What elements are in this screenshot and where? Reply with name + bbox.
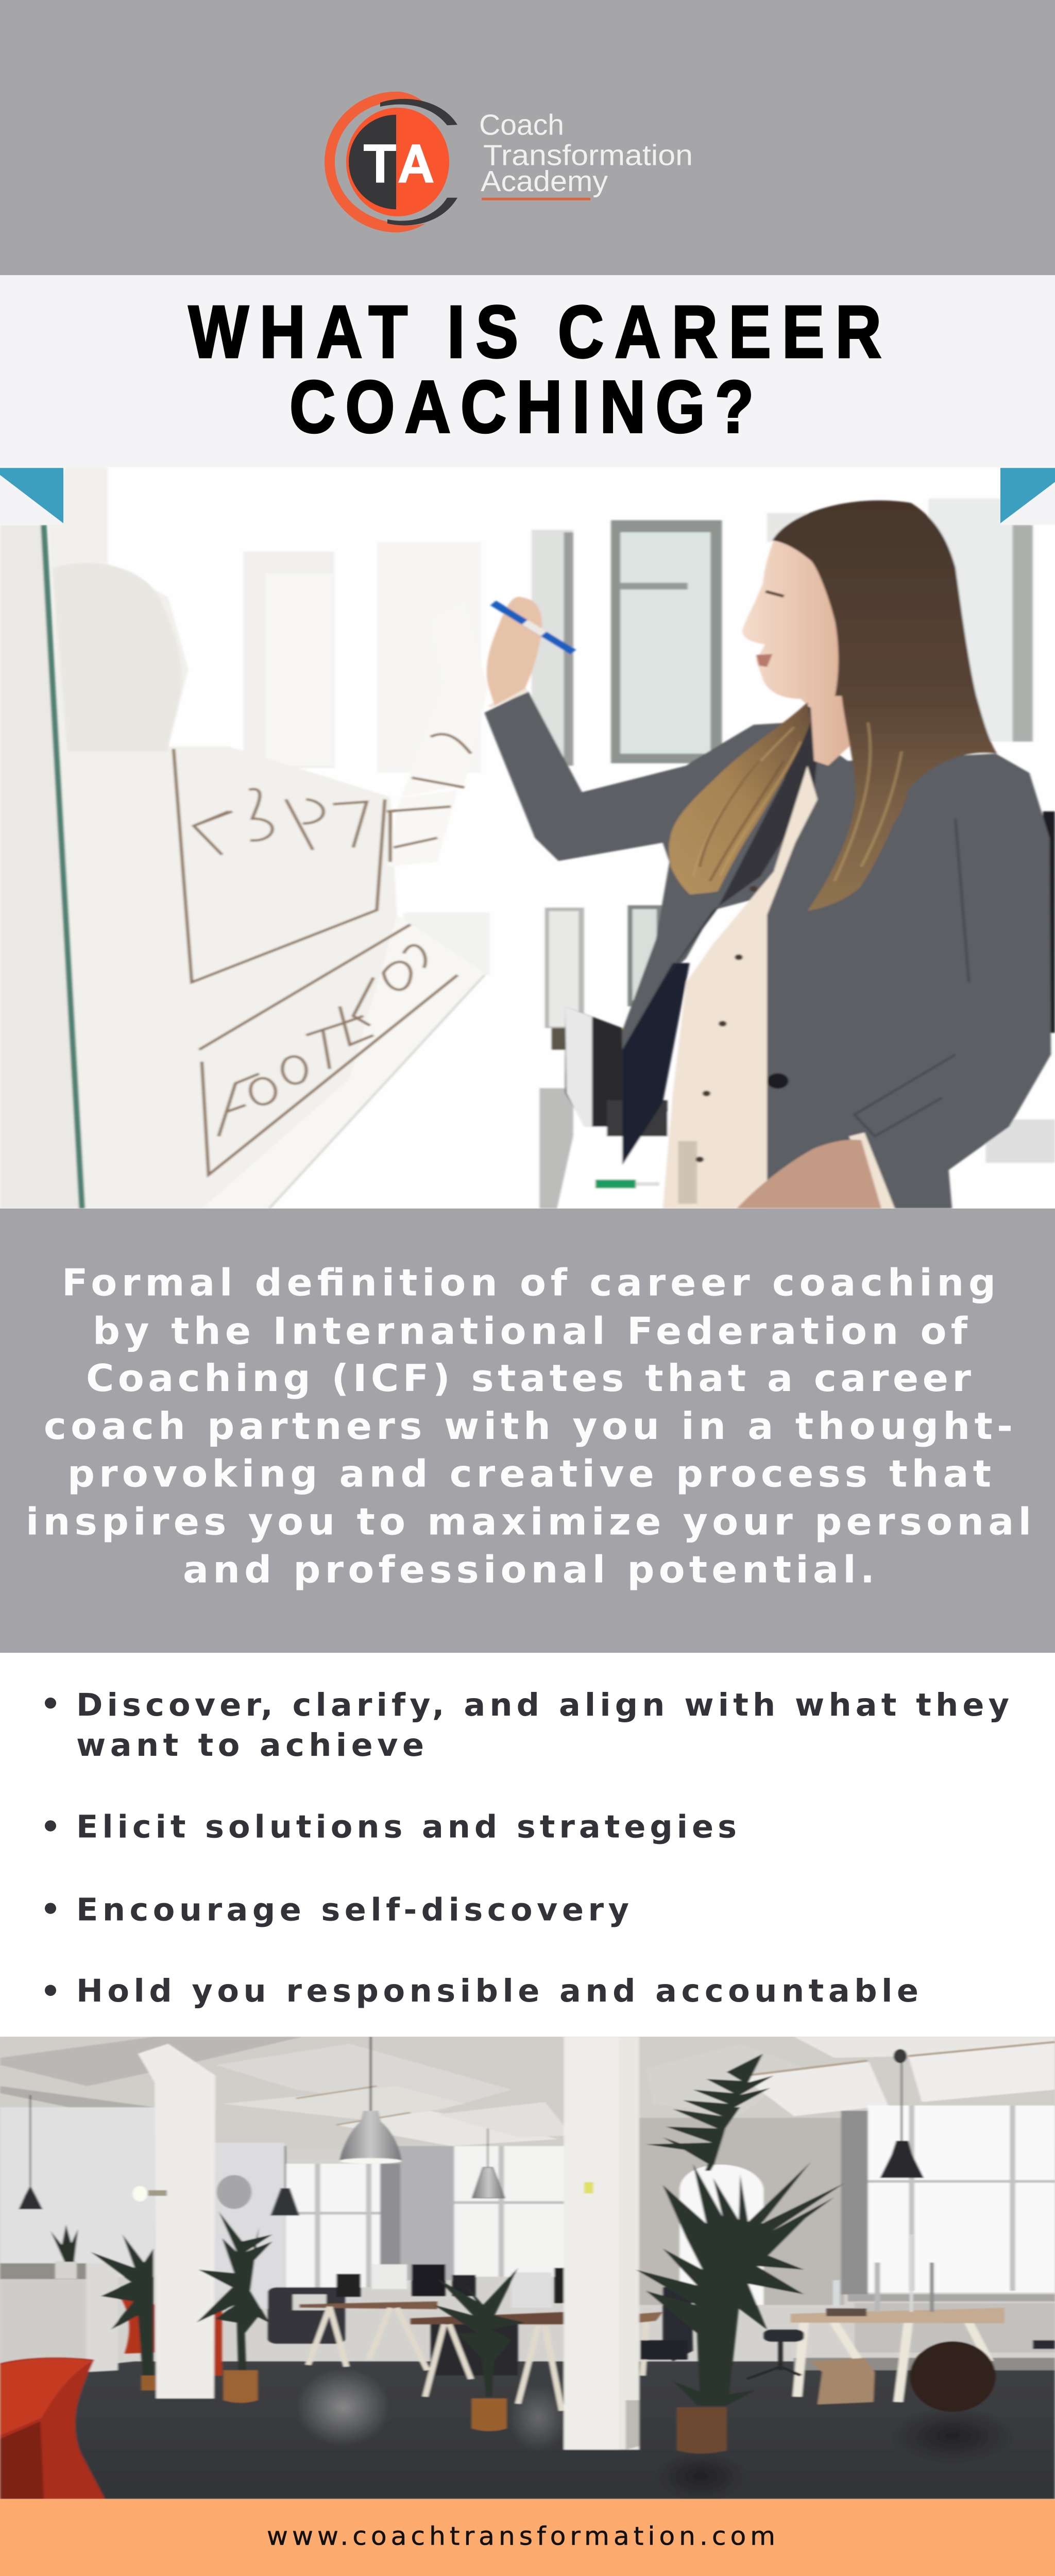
pendant lamps <box>20 2037 924 2215</box>
definition text: coach partners with you in a thought- <box>44 1405 1013 1448</box>
logo wordmark: Transformation <box>483 139 693 172</box>
panel: footer <box>0 2499 1055 2576</box>
whiteboard glass <box>0 467 488 1209</box>
panel: coaching outcomes list <box>0 1653 1055 2037</box>
woman: blouse <box>663 766 895 1209</box>
logo wordmark: Academy <box>481 165 608 198</box>
definition text: by the International Federation of <box>93 1310 968 1353</box>
icon: TA emblem <box>325 92 457 232</box>
floor reflections <box>296 2368 748 2501</box>
list item: elicit: Elicit solutions and strategies <box>76 1809 737 1845</box>
desk and printer <box>539 811 1055 1209</box>
title: What is career coaching?: COACHING? <box>290 366 754 448</box>
website url: www.coachtransformation.com <box>267 2521 775 2551</box>
definition text: provoking and creative process that <box>67 1453 991 1496</box>
photo: woman writing on a whiteboard <box>0 467 1055 1209</box>
reception counter <box>0 2225 118 2372</box>
palm foliage silhouettes <box>91 2054 844 2405</box>
woman: jacket <box>484 686 1051 1209</box>
office chairs <box>640 2284 1055 2379</box>
background windows <box>244 499 1033 1028</box>
list item: encourage: Encourage self-discovery <box>76 1892 629 1928</box>
photo: open plan office <box>0 2037 1055 2501</box>
whiteboard handwriting <box>174 734 471 1175</box>
logo wordmark <box>479 109 693 200</box>
list item: hold: Hold you responsible and accountable <box>76 1973 918 2009</box>
columns <box>138 2037 639 2450</box>
title: What is career coaching?: WHAT IS CAREER <box>189 291 881 373</box>
woman: lower hand <box>737 1140 881 1209</box>
definition text: Formal definition of career coaching <box>62 1261 996 1304</box>
list item: discover: Discover, clarify, and align with what they <box>76 1687 1009 1723</box>
sofa and desks <box>268 2234 1005 2411</box>
floor <box>0 2361 1055 2499</box>
logo: Coach Transformation Academy <box>325 92 693 232</box>
panel: title band <box>0 275 1055 468</box>
definition text: Coaching (ICF) states that a career <box>86 1357 971 1400</box>
exercise ball <box>910 2341 996 2412</box>
woman: face and neck <box>742 532 855 766</box>
definition text: and professional potential. <box>183 1548 875 1591</box>
list item: discover <box>45 1687 1009 1764</box>
woman: long hair <box>669 500 997 911</box>
definition text: inspires you to maximize your personal <box>26 1500 1031 1544</box>
panel: right corner ribbon <box>1000 468 1055 525</box>
ceiling <box>0 2037 1055 2149</box>
walls <box>0 2107 868 2309</box>
radiator <box>855 2303 1055 2352</box>
windows <box>286 2106 1055 2305</box>
list item: discover: want to achieve <box>76 1727 424 1764</box>
exercise ball shadow <box>889 2407 1017 2464</box>
panel: header with logo <box>0 0 1055 275</box>
plant pots <box>141 2370 727 2453</box>
panel: formal definition <box>0 1209 1055 1653</box>
panel: left corner ribbon <box>0 468 63 525</box>
definition text <box>26 1261 1031 1591</box>
red chairs <box>0 2298 222 2499</box>
logo wordmark: Coach <box>479 109 564 142</box>
woman: raised hand and pen <box>487 597 573 705</box>
title: What is career coaching? <box>189 291 881 448</box>
